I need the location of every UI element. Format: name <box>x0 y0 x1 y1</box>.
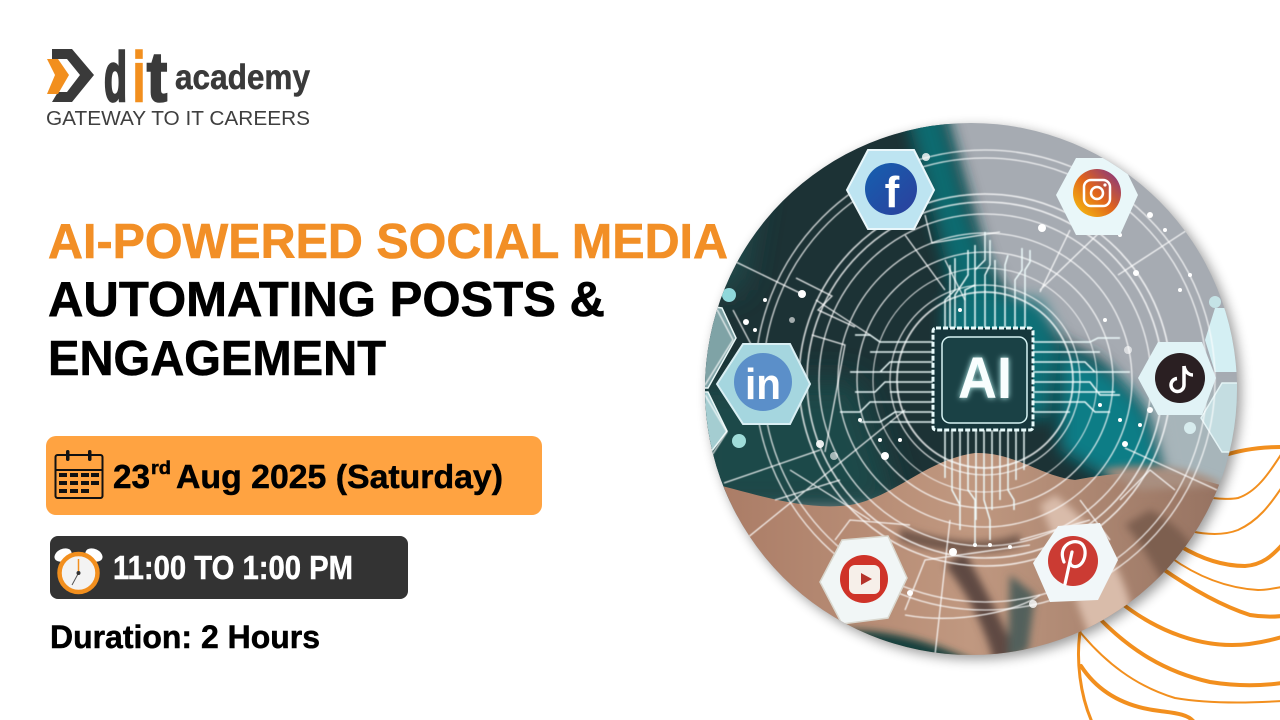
icon: alarm clock <box>52 546 105 592</box>
date text: rd <box>151 458 171 478</box>
circle image shadow <box>709 127 1241 659</box>
AI label glow: AI <box>958 346 1012 411</box>
logo wordmark dit: d <box>104 38 127 116</box>
background colour fields <box>690 110 1240 510</box>
icon: linkedin: in <box>745 360 781 409</box>
date pill <box>46 436 542 515</box>
network connectors <box>705 215 1217 655</box>
date text: 23 <box>113 458 150 495</box>
title line 2: AUTOMATING POSTS & <box>48 273 605 327</box>
logo wordmark dit <box>104 38 167 116</box>
icon: calendar <box>56 450 102 498</box>
network nodes <box>743 153 1192 608</box>
side hexagons <box>700 288 1245 452</box>
time pill <box>50 536 408 599</box>
icon: facebook: f <box>885 168 900 217</box>
logo mark <box>47 49 94 102</box>
logo wordmark academy: academy <box>175 58 310 97</box>
icon: facebook <box>847 150 934 229</box>
icon: tiktok <box>1138 342 1216 415</box>
duration: Duration: 2 Hours <box>50 619 320 655</box>
icon: youtube <box>820 536 907 624</box>
orbit rings <box>755 150 1215 610</box>
circular illustration: AI and social media network <box>690 110 1245 670</box>
hand <box>724 453 1219 655</box>
circuit traces around chip <box>840 232 1130 545</box>
title <box>48 215 728 386</box>
time text: 11:00 TO 1:00 PM <box>113 549 353 586</box>
logo tagline: GATEWAY TO IT CAREERS <box>46 108 310 130</box>
AI label: AI <box>958 346 1012 411</box>
icon: instagram <box>1056 158 1138 235</box>
date text: Aug 2025 (Saturday) <box>176 458 503 495</box>
icon: linkedin <box>717 344 810 424</box>
AI chip <box>933 328 1033 430</box>
logo <box>46 38 310 130</box>
decorative orange wave lines <box>1078 447 1280 720</box>
title line 1: AI-POWERED SOCIAL MEDIA <box>48 215 728 269</box>
logo wordmark dit: t <box>147 38 167 116</box>
title line 3: ENGAGEMENT <box>48 332 386 386</box>
logo wordmark dit: i <box>133 38 145 116</box>
icon: pinterest <box>1033 523 1118 602</box>
